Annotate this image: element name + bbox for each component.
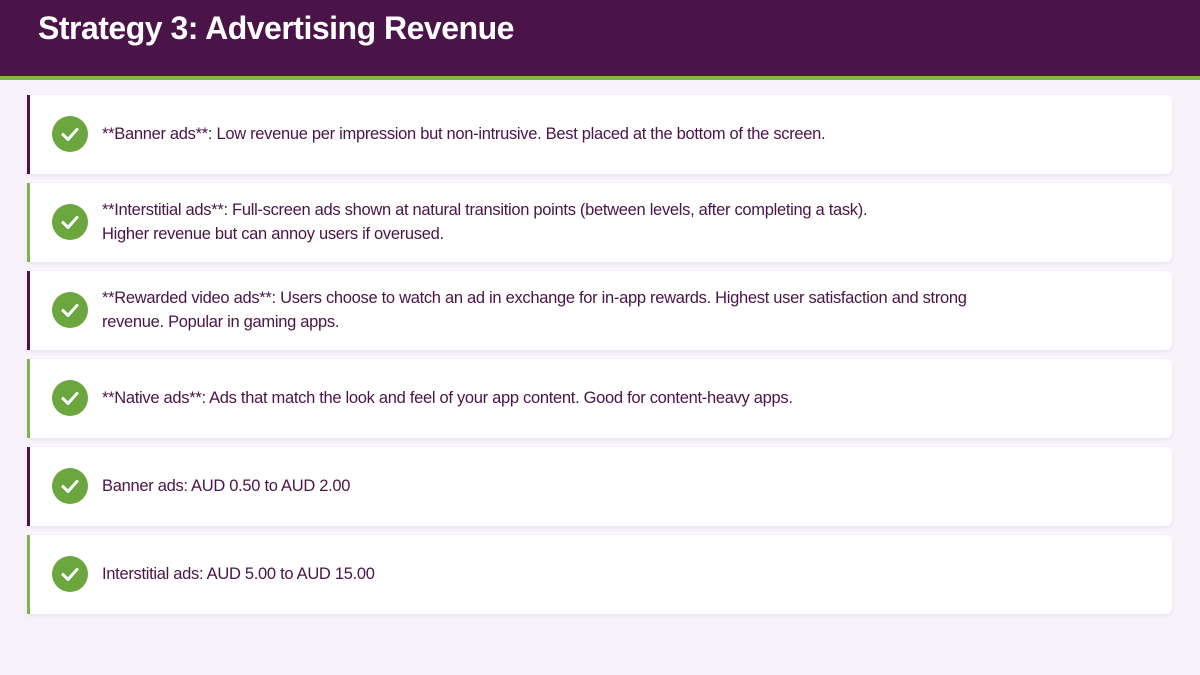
card: native ads xyxy=(27,359,1172,438)
title: Strategy 3: Advertising Revenue xyxy=(38,10,514,46)
header xyxy=(0,0,1200,80)
icon: check xyxy=(52,468,88,504)
text xyxy=(102,200,867,242)
text: Banner ads: AUD 0.50 to AUD 2.00 xyxy=(102,476,350,494)
card: rewarded video ads xyxy=(27,271,1172,350)
icon: check xyxy=(52,116,88,152)
text xyxy=(102,288,967,330)
icon: check xyxy=(52,380,88,416)
text: revenue. Popular in gaming apps. xyxy=(102,312,339,330)
icon: check xyxy=(52,292,88,328)
text: **Rewarded video ads**: Users choose to watch an ad in exchange for in-app rewards. Highest user satisfaction and strong xyxy=(102,288,967,306)
card: banner ads xyxy=(27,95,1172,174)
icon: check xyxy=(52,556,88,592)
icon: check xyxy=(52,204,88,240)
card: interstitial price xyxy=(27,535,1172,614)
text: Higher revenue but can annoy users if overused. xyxy=(102,224,444,242)
text: **Banner ads**: Low revenue per impression but non-intrusive. Best placed at the bottom of the screen. xyxy=(102,124,825,142)
text: **Interstitial ads**: Full-screen ads shown at natural transition points (between levels, after completing a task). xyxy=(102,200,867,218)
text: Interstitial ads: AUD 5.00 to AUD 15.00 xyxy=(102,564,375,582)
card: interstitial ads xyxy=(27,183,1172,262)
card: banner price xyxy=(27,447,1172,526)
text: **Native ads**: Ads that match the look and feel of your app content. Good for content-heavy apps. xyxy=(102,388,793,406)
